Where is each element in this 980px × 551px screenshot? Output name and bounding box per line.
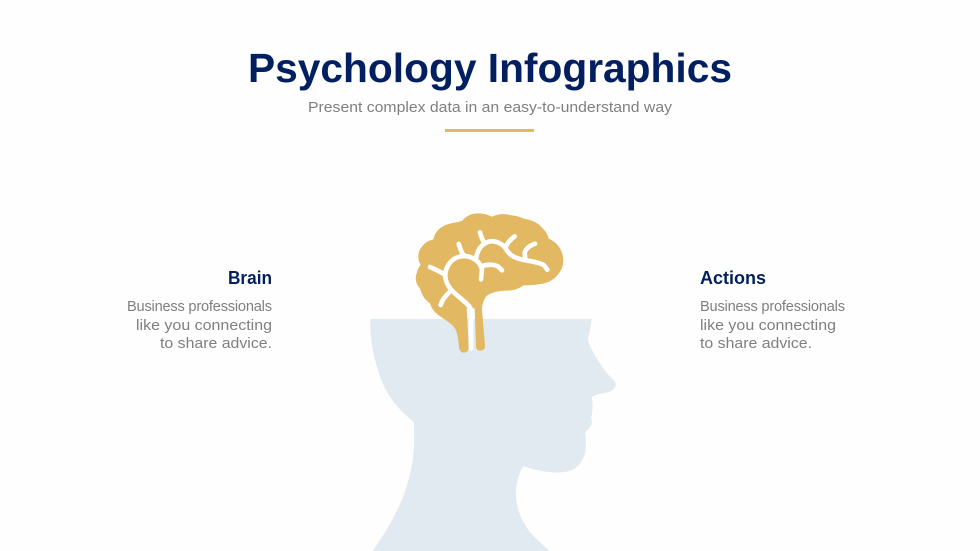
body text: Actions — [700, 299, 845, 352]
icon: brain — [416, 213, 563, 353]
body text: Actions: like you connecting — [700, 317, 836, 334]
accent underline — [445, 129, 534, 132]
subtitle: Present complex data in an easy-to-understand way — [308, 99, 673, 116]
title: Psychology Infographics — [248, 45, 732, 91]
body text: Actions: Business professionals — [700, 299, 845, 315]
head silhouette — [370, 319, 616, 551]
heading: Brain: Brain — [228, 268, 272, 288]
left text block: Brain — [127, 268, 272, 352]
body text: Brain: to share advice. — [160, 335, 272, 352]
body text: Brain: Business professionals — [127, 299, 272, 315]
heading: Actions: Actions — [700, 268, 766, 288]
brain folds — [430, 232, 547, 348]
body text: Actions: to share advice. — [700, 335, 812, 352]
right text block: Actions — [700, 268, 845, 352]
body text: Brain: like you connecting — [136, 317, 272, 334]
body text: Brain — [127, 299, 272, 352]
brain silhouette — [416, 213, 563, 353]
